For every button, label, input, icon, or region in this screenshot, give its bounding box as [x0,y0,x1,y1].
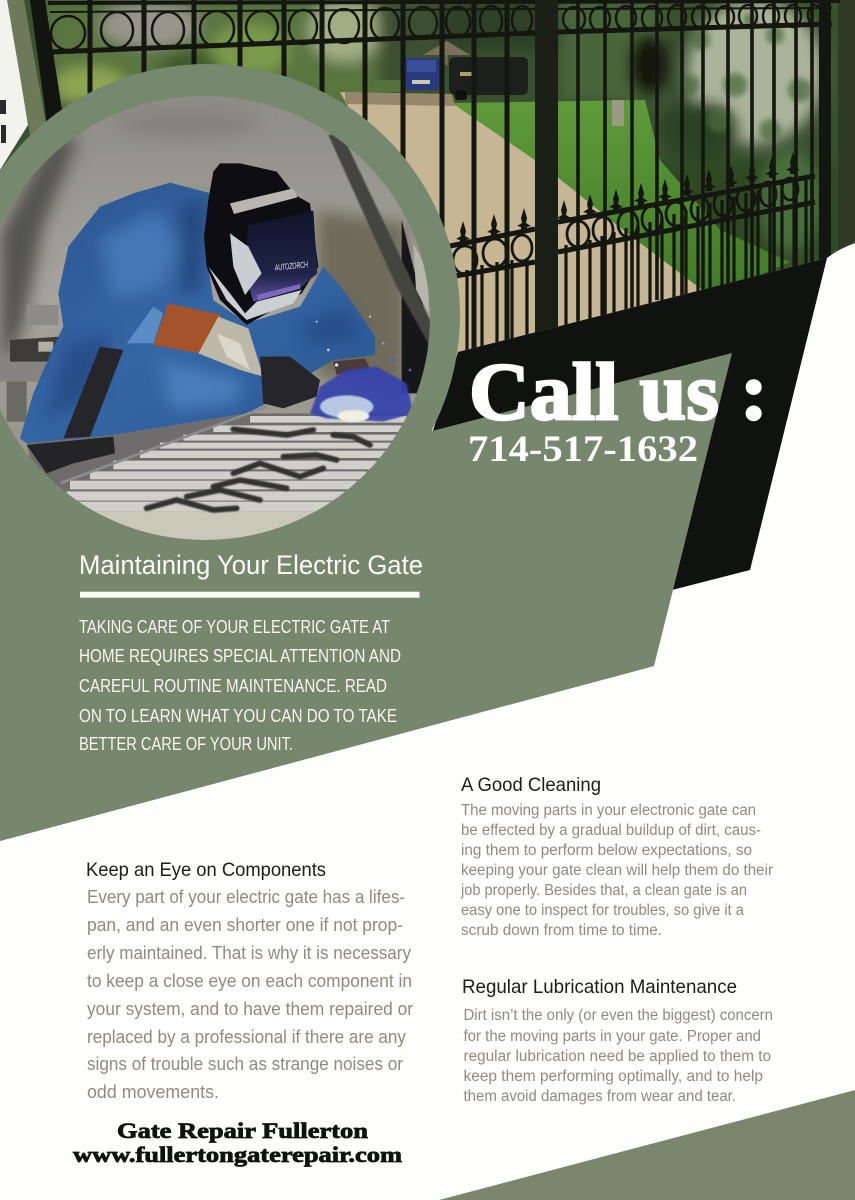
blue car [406,58,440,90]
lower-left fill below the circle [0,400,654,841]
gazebo [423,41,470,55]
section body: erly maintained. That is why it is necessary [87,942,412,963]
dog bars [467,176,806,360]
section heading: A Good Cleaning [461,774,601,796]
intro paragraph: ON TO LEARN WHAT YOU CAN DO TO TAKE [79,706,397,726]
section body: odd movements. [87,1081,219,1102]
lower rails [450,176,815,277]
photo: iron driveway gate [0,0,855,380]
lower rings [453,178,798,274]
green angled panel [0,300,732,841]
section: regular lubrication maintenance [462,976,773,1105]
intro paragraph [79,617,401,754]
welding helmet [204,163,318,325]
green circle frame [0,64,460,566]
spear tops [456,152,800,243]
section body [460,802,773,939]
stone urn [612,100,624,126]
tent folds and background [0,107,407,393]
section body: to keep a close eye on each component in [87,970,412,991]
glove [153,303,222,353]
section: keep an eye on components [86,859,413,1102]
section body: for the moving parts in your gate. Proper and [464,1028,761,1045]
gravel drive [340,92,705,365]
intro paragraph: HOME REQUIRES SPECIAL ATTENTION AND [79,646,401,666]
phone number: 714-517-1632 [468,429,698,470]
table slats [26,414,408,512]
section body: Every part of your electric gate has a lifes- [87,886,405,907]
photo: welder at work [0,90,440,550]
white wall and posts on left [0,0,28,170]
helmet brand: AUTOZORCH [274,259,309,273]
scrollwork [147,429,370,510]
call us heading: Call us : [469,346,768,437]
torch and hand [260,357,320,408]
tree mottling [680,13,812,141]
section body [464,1007,773,1105]
section body: scrub down from time to time. [461,922,662,939]
intro paragraph: BETTER CARE OF YOUR UNIT. [79,734,293,754]
section body: job properly. Besides that, a clean gate is an [460,882,747,899]
lawn [452,100,790,300]
gate rails [48,1,840,52]
far right post [838,0,855,250]
section body: easy one to inspect for troubles, so give it a [461,902,744,919]
section body: keep them performing optimally, and to help [464,1068,763,1085]
intro paragraph: CAREFUL ROUTINE MAINTENANCE. READ [79,676,387,696]
section body: be effected by a gradual buildup of dirt, caus- [461,822,761,839]
footer: website: www.fullertongaterepair.com [73,1142,402,1167]
welding rod [60,407,267,483]
section body: replaced by a professional if there are any [87,1026,407,1047]
heading rule [80,592,420,598]
section body [87,886,413,1102]
section body: them avoid damages from wear and tear. [464,1088,736,1105]
jacket [20,183,375,443]
bench and clutter [27,305,58,325]
gate rings [51,5,822,50]
diagonal beam [328,133,433,343]
footer: company name: Gate Repair Fullerton [117,1118,368,1143]
intro paragraph: TAKING CARE OF YOUR ELECTRIC GATE AT [79,617,390,637]
dark car [449,57,528,95]
section body: your system, and to have them repaired or [87,998,413,1019]
section heading: Keep an Eye on Components [86,859,326,881]
section body: ing them to perform below expectations, so [461,842,752,859]
section: a good cleaning [460,774,773,939]
black angled panel [430,258,827,600]
section body: signs of trouble such as strange noises or [87,1053,403,1074]
main heading: Maintaining Your Electric Gate [79,550,423,580]
section body: The moving parts in your electronic gate can [461,802,756,819]
centre and end posts [535,0,558,332]
gate vertical bars [90,0,507,350]
sparks [310,316,413,422]
bottom-right green corner [439,1090,855,1200]
section body: keeping your gate clean will help them do their [461,862,773,879]
cuff [127,307,163,343]
strap [63,347,123,438]
section body: Dirt isn’t the only (or even the biggest) concern [464,1007,773,1024]
section heading: Regular Lubrication Maintenance [462,976,737,998]
section body: regular lubrication need be applied to them to [464,1048,771,1065]
section body: pan, and an even shorter one if not prop- [87,914,403,935]
